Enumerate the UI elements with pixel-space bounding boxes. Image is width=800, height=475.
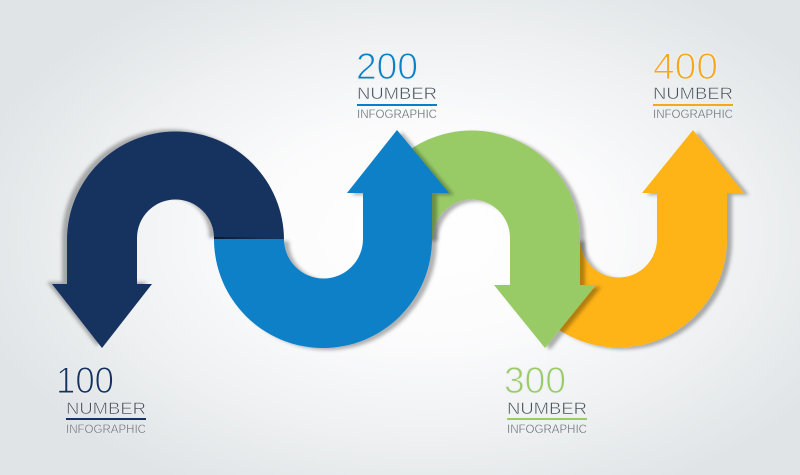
arrow: green step 300	[363, 130, 596, 348]
arrow: yellow step 400	[510, 130, 744, 348]
label: 400: NUMBER	[653, 84, 733, 103]
label: 100: 100	[56, 360, 114, 401]
label: 100: NUMBER	[66, 399, 146, 418]
label: 400	[653, 46, 733, 121]
label: 100: INFOGRAPHIC	[66, 424, 146, 436]
label: 300: NUMBER	[507, 399, 587, 418]
label: 300: 300	[504, 360, 566, 401]
arrow: navy step 100	[52, 132, 284, 348]
label: 200: 200	[356, 46, 418, 87]
label: 200: NUMBER	[357, 84, 437, 103]
label: 300	[504, 360, 587, 436]
label: 400: 400	[653, 46, 718, 87]
label: 200	[356, 46, 437, 121]
arrow: blue step 200	[214, 130, 449, 348]
label: 400: INFOGRAPHIC	[653, 109, 733, 121]
label: 300: INFOGRAPHIC	[507, 424, 587, 436]
label: 200: INFOGRAPHIC	[357, 109, 437, 121]
label: 100	[56, 360, 146, 436]
